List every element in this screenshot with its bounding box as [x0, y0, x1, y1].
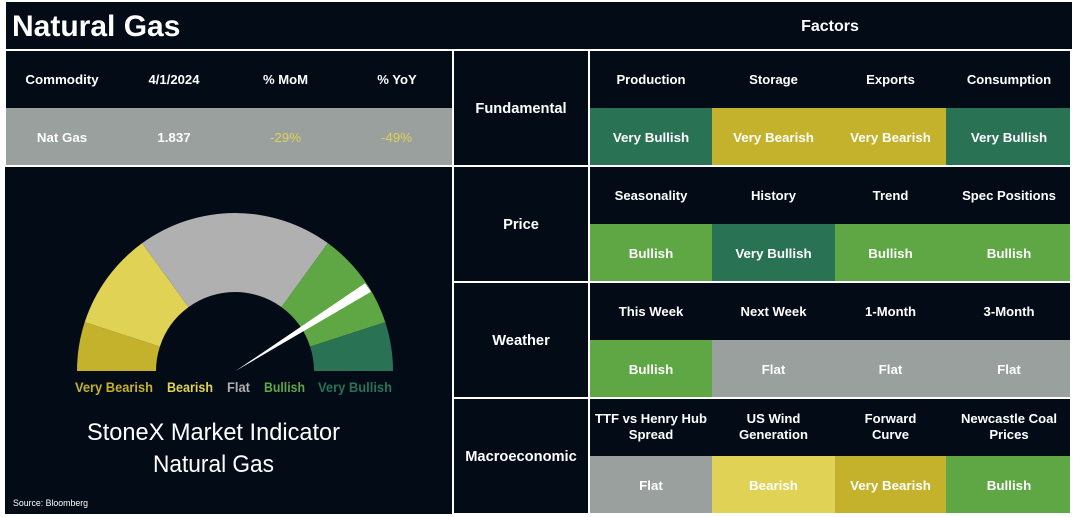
rating: 1-Month — [835, 340, 946, 397]
factor: History: History — [751, 188, 796, 202]
rating: TTF vs Henry Hub Spread — [590, 456, 712, 513]
legend: bearish: Bearish — [167, 380, 213, 395]
table cell: price — [118, 108, 230, 165]
factor: 1-Month: 1-Month — [865, 304, 916, 318]
rating: US Wind Generation: Bearish — [749, 478, 798, 492]
factor: Seasonality — [590, 167, 712, 224]
factor: Production — [590, 51, 712, 108]
rating: 3-Month: Flat — [997, 362, 1021, 376]
gauge caption — [87, 419, 340, 478]
legend: flat: Flat — [227, 380, 250, 395]
gauge needle — [236, 283, 371, 371]
factor: Forward Curve — [835, 399, 946, 456]
row heading: Price: Price — [503, 217, 539, 233]
factor: Consumption: Consumption — [967, 72, 1051, 86]
rating: US Wind Generation — [712, 456, 835, 513]
factor: Next Week — [712, 283, 835, 340]
factor: Spec Positions: Spec Positions — [962, 188, 1056, 202]
factor: 3-Month — [946, 283, 1070, 340]
title bar — [6, 2, 1072, 49]
table cell: Nat Gas: Nat Gas — [37, 130, 87, 144]
rating: This Week: Bullish — [629, 362, 673, 376]
row heading: Weather: Weather — [492, 333, 550, 349]
row: Fundamental — [454, 51, 1070, 165]
factor: Trend: Trend — [873, 188, 908, 202]
factor: Forward Curve: Curve — [872, 426, 909, 442]
rating: Production — [590, 108, 712, 165]
factor: This Week — [590, 283, 712, 340]
row: Macroeconomic — [454, 399, 1070, 513]
table header: % MoM — [230, 51, 341, 108]
legend labels — [75, 380, 392, 395]
rating: Exports: Very Bearish — [850, 130, 931, 144]
table header: % YoY — [341, 51, 452, 108]
factor: History — [712, 167, 835, 224]
factor: Exports: Exports — [866, 72, 915, 86]
legend: very bullish: Very Bullish — [318, 380, 392, 395]
factor: Production: Production — [616, 72, 686, 86]
row heading: Macroeconomic: Macroeconomic — [465, 449, 577, 465]
rating: Forward Curve: Very Bearish — [850, 478, 931, 492]
rating: Newcastle Coal Prices: Bullish — [987, 478, 1031, 492]
table header: Commodity — [6, 51, 118, 108]
table cell: Nat Gas — [6, 108, 118, 165]
factor: Storage — [712, 51, 835, 108]
factor: TTF vs Henry Hub Spread: TTF vs Henry Hub — [595, 410, 707, 426]
factor: US Wind Generation: Generation — [739, 426, 808, 442]
factor: US Wind Generation — [712, 399, 835, 456]
table header: % MoM: % MoM — [263, 72, 308, 86]
factor: Newcastle Coal Prices: Newcastle Coal — [961, 410, 1057, 426]
rating: This Week — [590, 340, 712, 397]
factor: 1-Month — [835, 283, 946, 340]
factor: Newcastle Coal Prices — [946, 399, 1070, 456]
row heading: Macroeconomic — [454, 399, 588, 513]
factor: Next Week: Next Week — [740, 304, 806, 318]
rating: 1-Month: Flat — [879, 362, 902, 376]
factor: Spec Positions — [946, 167, 1070, 224]
legend: very bearish: Very Bearish — [75, 380, 153, 395]
rating: Forward Curve — [835, 456, 946, 513]
caption line 2: Natural Gas — [153, 451, 274, 478]
rating: Next Week — [712, 340, 835, 397]
table cell: MoM change: -29% — [270, 130, 301, 144]
table cell: YoY change — [341, 108, 452, 165]
row heading: Fundamental — [454, 51, 588, 165]
factor: Exports — [835, 51, 946, 108]
factor: Seasonality: Seasonality — [615, 188, 687, 202]
rating: Spec Positions — [946, 224, 1070, 281]
rating: Next Week: Flat — [762, 362, 785, 376]
rating: History — [712, 224, 835, 281]
gauge segment: very bullish — [310, 322, 393, 371]
gauge chart — [13, 213, 393, 509]
table header: date: 4/1/2024 — [149, 72, 199, 86]
rating: Seasonality — [590, 224, 712, 281]
rating: TTF vs Henry Hub Spread: Flat — [639, 478, 663, 492]
table header: % YoY: % YoY — [377, 72, 417, 86]
gauge segment: bearish — [85, 243, 189, 347]
table cell: YoY change: -49% — [381, 130, 412, 144]
factor: Forward Curve: Forward — [865, 410, 916, 426]
factor: Trend — [835, 167, 946, 224]
factor: Consumption — [946, 51, 1070, 108]
rating: Seasonality: Bullish — [629, 246, 673, 260]
rating: Storage — [712, 108, 835, 165]
legend: bullish: Bullish — [264, 380, 305, 395]
factor: This Week: This Week — [619, 304, 683, 318]
rating: Exports — [835, 108, 946, 165]
gauge segment: flat — [142, 213, 328, 307]
factor: 3-Month: 3-Month — [984, 304, 1034, 318]
factor: Newcastle Coal Prices: Prices — [989, 426, 1029, 442]
panel: commodity table — [6, 51, 452, 165]
panel: market indicator gauge — [5, 167, 452, 514]
gauge segment: bullish — [281, 243, 385, 347]
rating: Newcastle Coal Prices — [946, 456, 1070, 513]
heading: Factors: Factors — [801, 18, 859, 35]
gauge segment: very bearish — [77, 322, 160, 371]
rating: 3-Month — [946, 340, 1070, 397]
row: Price — [454, 167, 1070, 281]
rating: Storage: Very Bearish — [733, 130, 814, 144]
rating: Consumption — [946, 108, 1070, 165]
row heading: Price — [454, 167, 588, 281]
factor: TTF vs Henry Hub Spread: Spread — [629, 426, 673, 442]
source note: Source: Bloomberg — [13, 498, 88, 509]
table header: Commodity: Commodity — [25, 72, 99, 86]
factor: TTF vs Henry Hub Spread — [590, 399, 712, 456]
table cell: MoM change — [230, 108, 341, 165]
factor: Storage: Storage — [749, 72, 798, 86]
table header: date — [118, 51, 230, 108]
rating: Production: Very Bullish — [613, 130, 689, 144]
title: Natural Gas: Natural Gas — [12, 10, 180, 43]
caption line 1: StoneX Market Indicator — [87, 419, 340, 446]
factor: US Wind Generation: US Wind — [747, 410, 800, 426]
row: Weather — [454, 283, 1070, 397]
rating: History: Very Bullish — [735, 246, 812, 260]
row heading: Fundamental: Fundamental — [475, 101, 567, 117]
rating: Trend: Bullish — [868, 246, 913, 260]
row heading: Weather — [454, 283, 588, 397]
table cell: price: 1.837 — [157, 130, 191, 144]
rating: Consumption: Very Bullish — [971, 130, 1047, 144]
rating: Trend — [835, 224, 946, 281]
rating: Spec Positions: Bullish — [987, 246, 1031, 260]
